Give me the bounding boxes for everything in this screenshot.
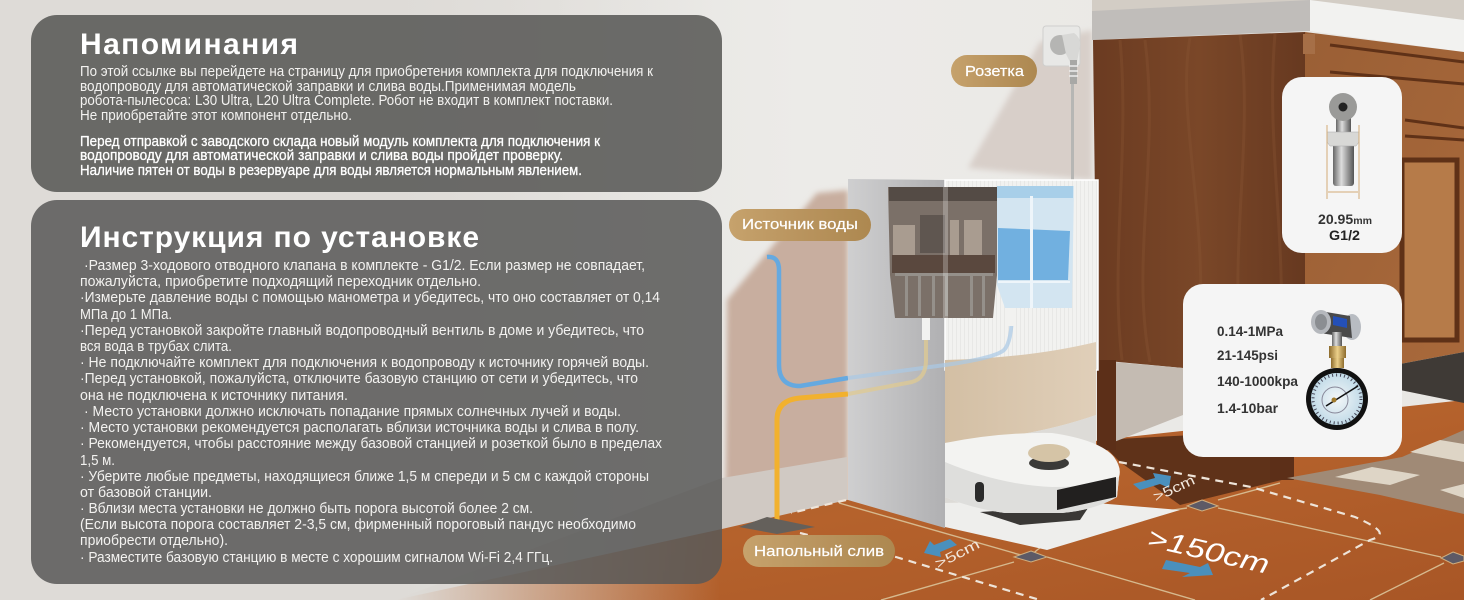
text block: instructions: · Место установки рекомендуется располагать вблизи источника воды и слива в полу. — [80, 420, 639, 436]
blue tank — [997, 186, 1074, 308]
text: MPa: 0.14-1MPa — [1217, 324, 1283, 339]
socket — [1043, 26, 1080, 180]
label: >150cm: >150cm — [1145, 523, 1272, 580]
text block: instructions: · Место установки должно исключать попадание прямых солнечных лучей и воды. — [84, 404, 621, 420]
cabinet recess and legs — [1097, 352, 1464, 480]
text: G1/2: G1/2 — [1329, 227, 1360, 243]
water inlet pipe wall — [767, 257, 848, 386]
robot vacuum — [945, 433, 1120, 513]
baseboard — [395, 457, 847, 600]
text block: purchase note: Не приобретайте этот компонент отдельно. — [80, 108, 352, 124]
text block: instructions: · Не подключайте комплект для подключения к водопроводу к источнику горячей воды. — [80, 355, 649, 371]
text block: factory check: Наличие пятен от воды в резервуаре для воды является нормальным явлением. — [80, 163, 582, 179]
robot brush shadow — [980, 505, 1090, 525]
text block: purchase note: водопроводу для автоматической заправки и слива воды.Применимая модель — [80, 79, 576, 95]
text block: instructions: · Рекомендуется, чтобы расстояние между базовой станцией и розеткой было в пределах — [80, 436, 663, 452]
text block: factory check: Перед отправкой с заводского склада новый модуль комплекта для подключения к — [80, 134, 601, 150]
text block: instructions: МПа до 1 МПа. — [80, 307, 172, 323]
wall shadow above station — [968, 30, 1092, 180]
text block: factory check: водопроводу для автоматической заправки и слива воды пройдет проверку. — [80, 148, 563, 164]
heading: reminders: Напоминания — [80, 28, 298, 61]
text block: instructions: · Вблизи места установки не должно быть порога высотой более 2 см. — [80, 501, 533, 517]
dashed clearance outline — [791, 462, 1380, 600]
text block: instructions: вся вода в трубах слита. — [80, 339, 232, 355]
card: water pressure — [1183, 284, 1402, 457]
arrow: left clearance — [924, 539, 957, 557]
faint pipes through panel — [848, 310, 1012, 378]
tile inlay diamonds — [1014, 500, 1464, 564]
text block: instructions: ·Размер 3-ходового отводного клапана в комплекте - G1/2. Если размер не совпадает, — [84, 258, 645, 274]
icon: pressure gauge — [1306, 310, 1368, 430]
panel: installation — [31, 200, 722, 584]
arrow: right clearance — [1133, 473, 1171, 490]
text block: factory check — [80, 134, 601, 179]
text block: instructions: приобрести отдельно). — [80, 533, 228, 549]
text block: purchase note: робота-пылесоса: L30 Ultra, L20 Ultra Complete. Робот не входит в комплект поставки. — [80, 93, 613, 109]
pill: floor drain: Напольный слив — [754, 543, 884, 560]
cabinet front — [1303, 32, 1464, 366]
floor tile lines — [839, 483, 1444, 600]
text block: instructions: ·Перед установкой, пожалуйста, отключите базовую станцию от сети и убедитесь, что — [80, 371, 638, 387]
card: G1/2 fitting — [1282, 77, 1402, 253]
pill: socket: Розетка — [965, 63, 1025, 80]
panel: reminders — [31, 15, 722, 192]
text block: purchase note: По этой ссылке вы перейдете на страницу для приобретения комплекта для подключения к — [80, 64, 654, 80]
faint yellow pipe through panel — [848, 320, 926, 394]
cabinet side wood panel — [1093, 32, 1305, 368]
station front — [945, 180, 1098, 370]
station — [848, 179, 1180, 550]
ramp mat — [945, 500, 1180, 550]
cabinet shadow floor — [1098, 430, 1290, 505]
text block: purchase note — [80, 64, 654, 124]
station lower opening — [945, 415, 1096, 520]
text: kpa: 140-1000kpa — [1217, 374, 1298, 389]
text block: instructions: ·Измерьте давление воды с помощью манометра и убедитесь, что оно составляет от 0,14 — [80, 290, 660, 306]
arrow: front clearance — [1162, 560, 1213, 577]
text: psi: 21-145psi — [1217, 348, 1278, 363]
rug — [1287, 430, 1464, 514]
pill: water source: Источник воды — [742, 216, 858, 233]
heading: installation: Инструкция по установке — [80, 221, 479, 254]
text block: instructions: (Если высота порога составляет 2-3,5 см, фирменный пороговый пандус необходимо — [80, 517, 636, 533]
text block: instructions: она не подключена к источнику питания. — [80, 388, 348, 404]
text block: instructions: · Разместите базовую станцию в месте с хорошим сигналом Wi-Fi 2,4 ГГц. — [80, 550, 553, 566]
icon: fitting — [1327, 93, 1359, 199]
text block: instructions: · Уберите любые предметы, находящиеся ближе 1,5 м спереди и 5 см с каждой стороны — [80, 469, 649, 485]
drain pipe wall — [777, 394, 848, 520]
brown tank — [888, 187, 997, 318]
beige band — [945, 342, 1096, 443]
pill: water source — [729, 209, 871, 241]
label: >5cm right: >5cm — [1151, 472, 1197, 505]
text: bar: 1.4-10bar — [1217, 401, 1279, 416]
text block: instructions: ·Перед установкой закройте главный водопроводный вентиль в доме и убедитесь, что — [80, 323, 644, 339]
text: 20.95mm: 20.95mm — [1318, 211, 1372, 227]
text block: instructions — [80, 258, 663, 566]
pill: socket — [951, 55, 1037, 87]
floor — [395, 400, 1464, 600]
countertop — [1092, 0, 1464, 52]
label: >5cm left: >5cm — [932, 536, 982, 572]
tank connectors — [922, 308, 1016, 340]
floor drain — [739, 517, 815, 534]
text block: instructions: 1,5 м. — [80, 453, 115, 469]
pill: floor drain — [743, 535, 895, 567]
wall shadow left of station — [725, 190, 848, 530]
left fade overlay — [0, 0, 720, 600]
station side panel — [848, 179, 945, 528]
text block: instructions: пожалуйста, приобретите подходящий переходник отдельно. — [80, 274, 481, 290]
text block: instructions: от базовой станции. — [80, 485, 212, 501]
